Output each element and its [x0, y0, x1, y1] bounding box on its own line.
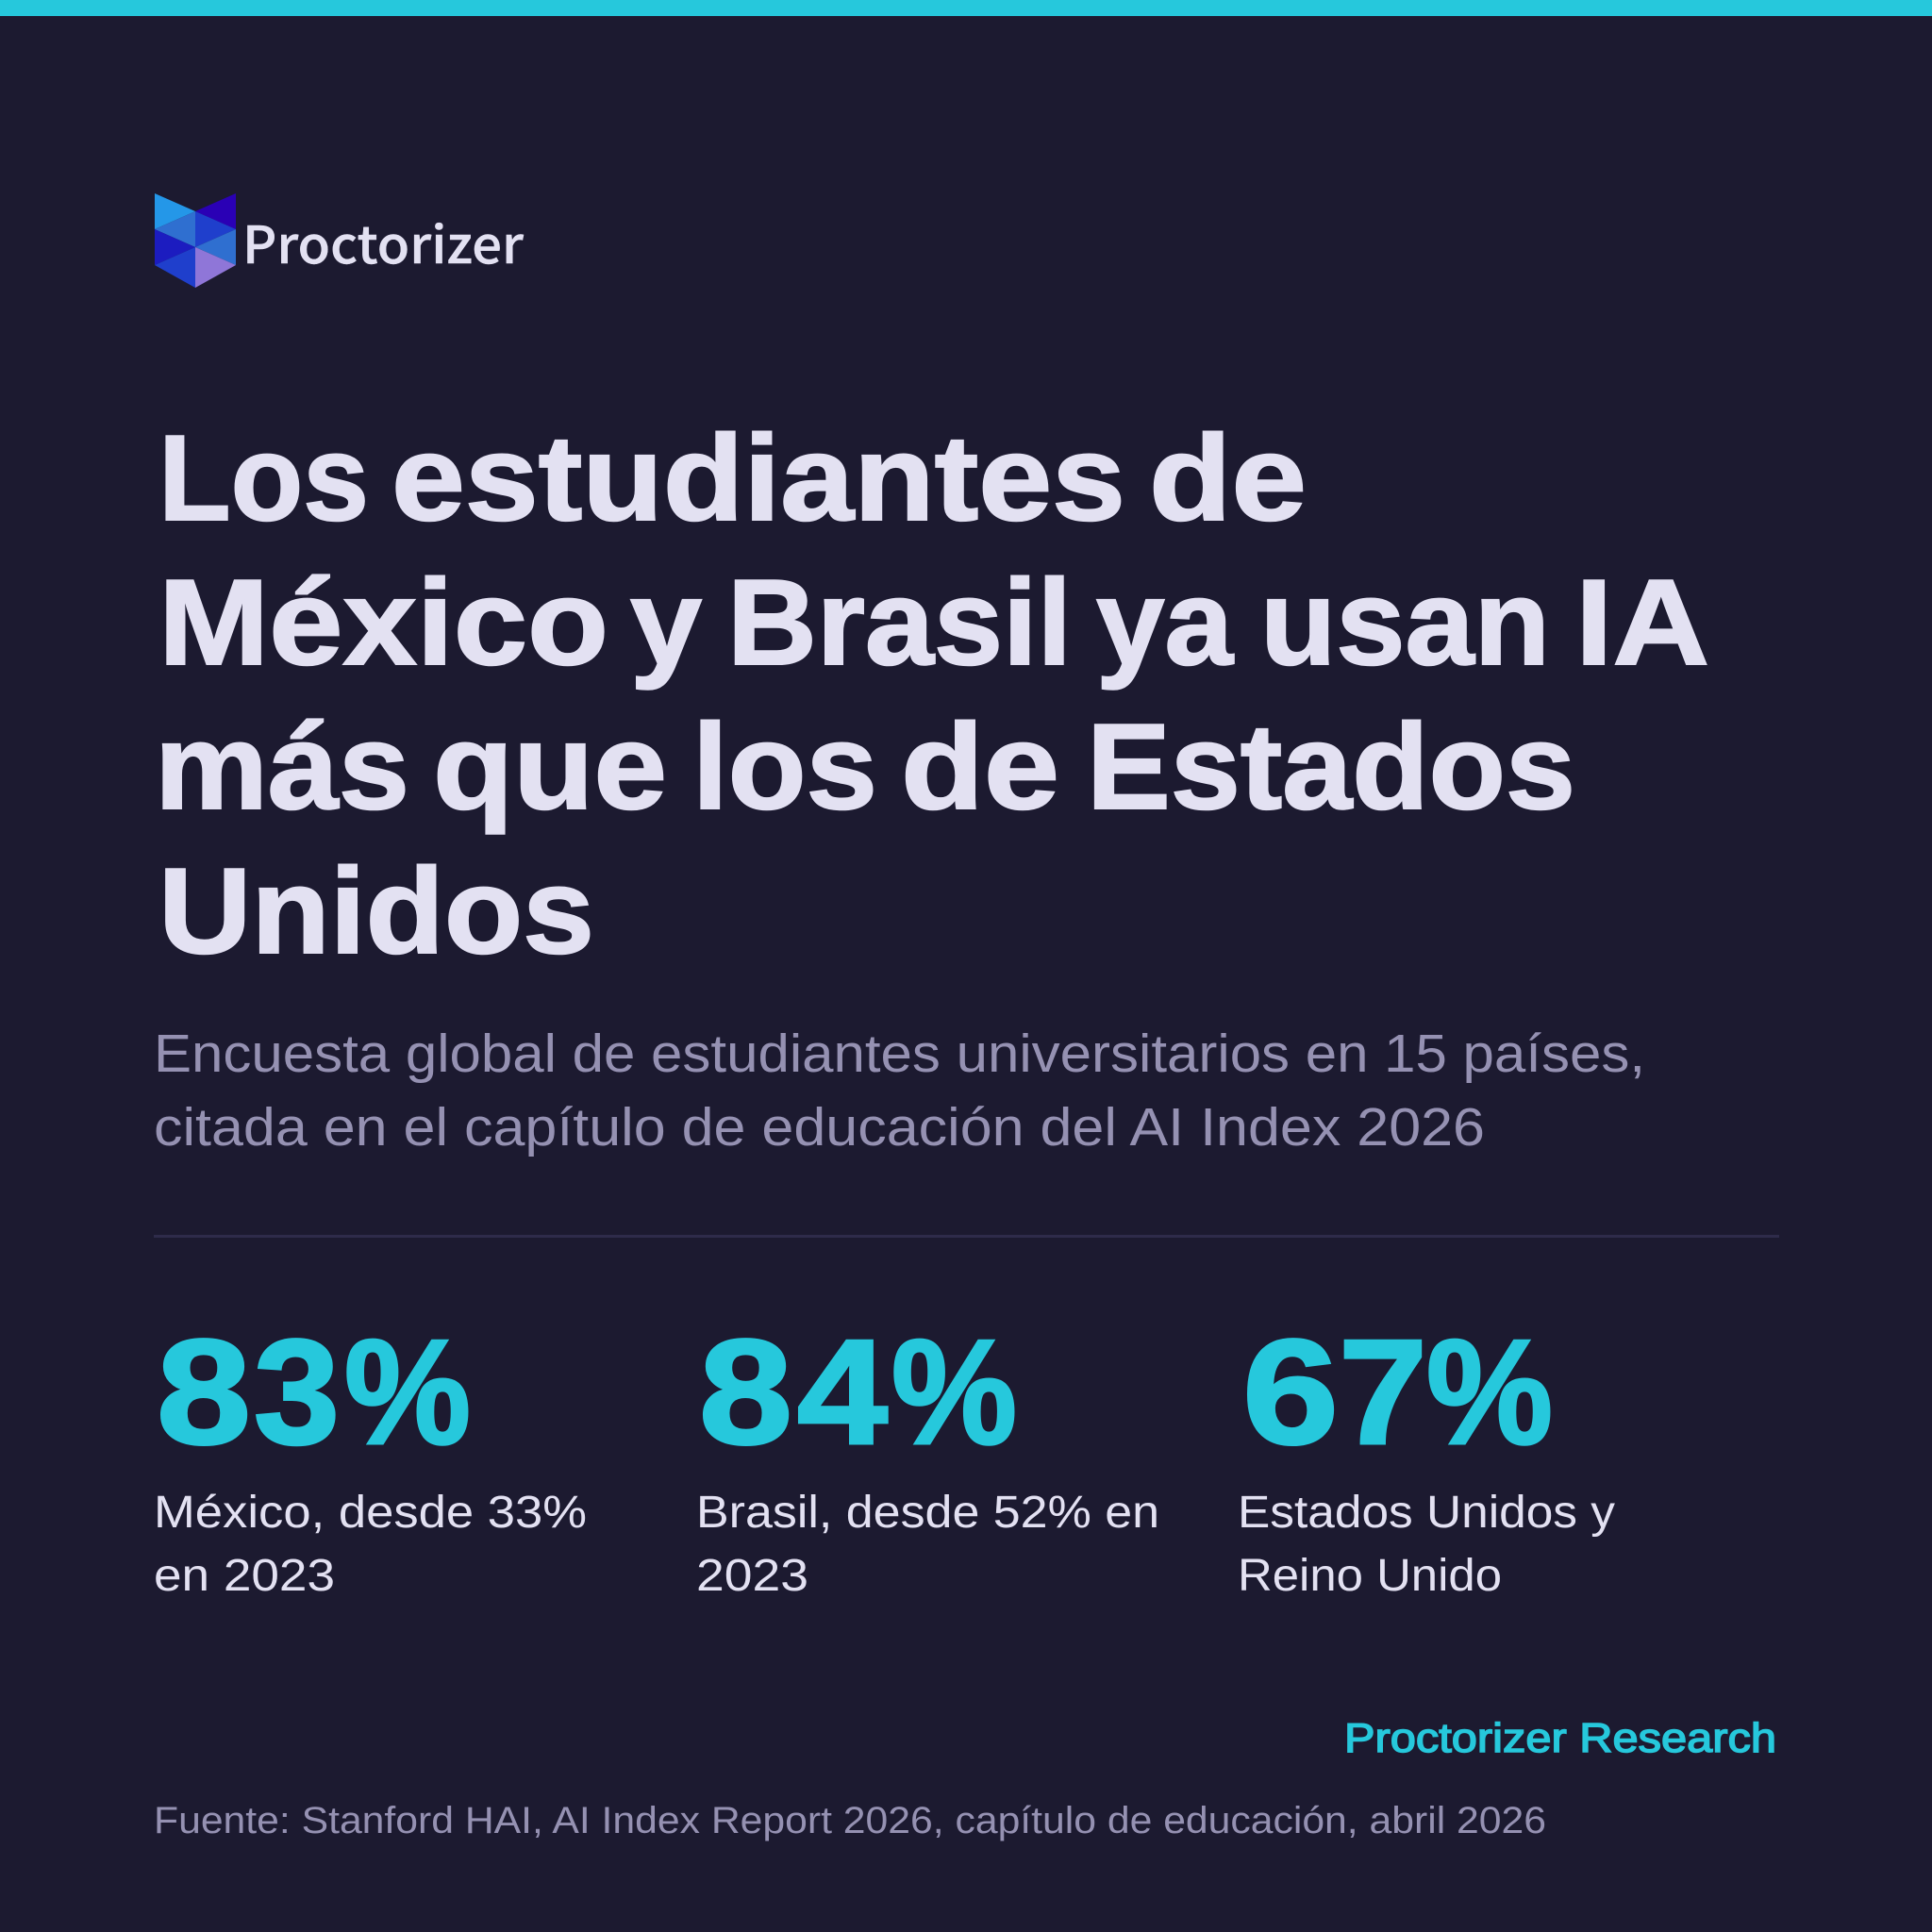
title: los: [692, 699, 877, 835]
stat value 67%: 6: [1242, 1309, 1339, 1475]
title: Brasil: [727, 555, 1072, 691]
stat label Estados Unidos: Estados Unidos y: [1238, 1488, 1615, 1538]
logo wordmark: Proctorizer: [242, 204, 525, 278]
logo: Proctorizer: [155, 193, 525, 288]
title: [155, 410, 1709, 979]
title: de: [1149, 410, 1307, 546]
stat value 67%: %: [1426, 1309, 1553, 1475]
title: estudiantes: [391, 410, 1125, 546]
stat value 67%: [1242, 1309, 1553, 1475]
title: de: [901, 699, 1059, 835]
stat label Estados Unidos: [1238, 1488, 1615, 1601]
source line: Fuente: Stanford HAI, AI Index Report 2026, capítulo de educación, abril 2026: [154, 1800, 1546, 1841]
subtitle: citada en el capítulo de educación del AI Index 2026: [154, 1097, 1485, 1158]
icon: faceted shield: [155, 193, 236, 288]
stat label Brasil: Brasil, desde 52% en: [696, 1488, 1159, 1538]
stat value 84%: 4: [797, 1309, 888, 1475]
top accent bar: [0, 0, 1932, 16]
title: Los: [158, 410, 369, 546]
stat value 83%: 3: [254, 1309, 340, 1475]
stat label México: en 2023: [154, 1551, 335, 1601]
title: usan: [1260, 555, 1550, 691]
attribution: Proctorizer Research: [1344, 1715, 1776, 1761]
title: ya: [1096, 555, 1234, 691]
title: que: [433, 699, 667, 835]
title: Estados: [1087, 699, 1575, 835]
stat value 84%: %: [891, 1309, 1017, 1475]
stat label Brasil: 2023: [696, 1551, 808, 1601]
stat value 84%: 8: [699, 1309, 792, 1475]
stat value 83%: %: [344, 1309, 471, 1475]
stat: Estados Unidos y Reino Unido: [1238, 1309, 1615, 1601]
title: Unidos: [158, 843, 594, 979]
subtitle: Encuesta global de estudiantes universitarios en 15 países,: [154, 1024, 1645, 1084]
stat value 83%: 8: [157, 1309, 251, 1475]
subtitle: [154, 1024, 1645, 1158]
stat value 84%: [699, 1309, 1017, 1475]
stat label Estados Unidos: Reino Unido: [1238, 1551, 1502, 1601]
stat label México: México, desde 33%: [154, 1488, 587, 1538]
stat: Brasil: [696, 1309, 1159, 1601]
title: IA: [1575, 555, 1709, 691]
stat value 67%: 7: [1339, 1309, 1427, 1475]
stat label México: [154, 1488, 587, 1601]
stat: México: [154, 1309, 587, 1601]
title: y: [630, 555, 702, 691]
stat value 83%: [157, 1309, 471, 1475]
title: más: [155, 699, 409, 835]
title: México: [158, 555, 608, 691]
stat label Brasil: [696, 1488, 1159, 1601]
